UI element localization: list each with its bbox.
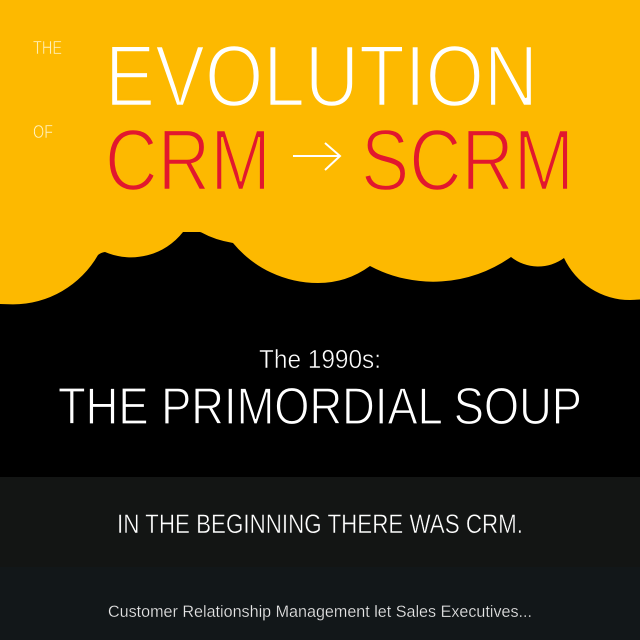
band: definition background <box>0 567 640 640</box>
panel: yellow header with scalloped edge <box>0 0 640 304</box>
icon: arrow from CRM to SCRM <box>293 143 340 170</box>
text: in the beginning statement: IN THE BEGINNING THERE WAS CRM. <box>117 509 523 539</box>
title: SCRM: SCRM <box>361 112 574 209</box>
title: CRM: CRM <box>105 112 271 209</box>
label: THE: THE <box>33 38 62 58</box>
title: EVOLUTION: EVOLUTION <box>105 28 538 125</box>
text: definition lead-in: Customer Relationship Management let Sales Executives... <box>108 602 532 621</box>
label: OF: OF <box>33 122 53 142</box>
band: beginning statement background <box>0 477 640 567</box>
heading: The 1990s: The 1990s: <box>259 344 381 374</box>
